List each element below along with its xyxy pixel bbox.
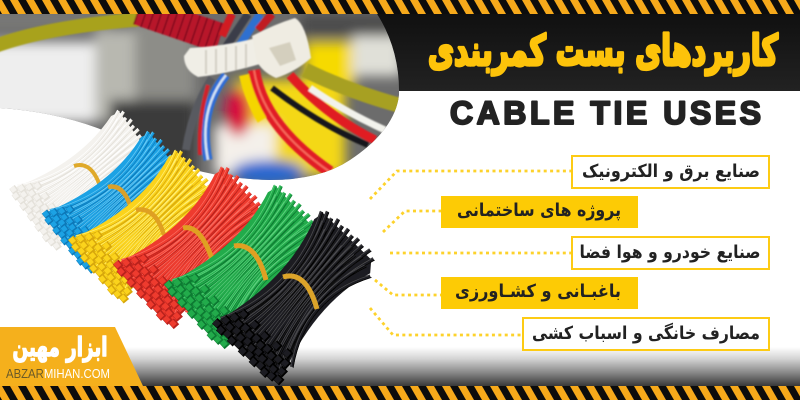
bundle: blue ties xyxy=(43,128,199,273)
photo: cables bound with a cable tie xyxy=(0,14,400,180)
label: household and moving: مصارف خانگی و اسباب کشی xyxy=(532,322,760,344)
label: household and moving xyxy=(523,318,769,350)
label: automotive and aerospace: صنایع خودرو و هوا فضا xyxy=(580,242,760,263)
title black band xyxy=(365,14,800,91)
connector: line 1 xyxy=(370,171,571,199)
logo badge: ABZARMIHAN.COM xyxy=(6,366,110,381)
English heading: CABLE TIE USES xyxy=(450,95,761,131)
bottom hazard stripe xyxy=(0,386,800,400)
top hazard stripe xyxy=(0,0,800,14)
bundle: yellow ties xyxy=(69,146,233,303)
label: construction projects: پروژه های ساختمانی xyxy=(457,200,621,221)
logo badge: ابزار مهین xyxy=(12,333,108,363)
bundle: red ties xyxy=(114,163,284,328)
connector: line 4 xyxy=(375,280,441,295)
product photo: bundles of coloured cable ties xyxy=(10,107,390,385)
label: automotive and aerospace xyxy=(572,237,769,269)
label: gardening and agriculture xyxy=(441,277,638,309)
label: electrical and electronics xyxy=(572,156,769,188)
logo badge xyxy=(0,327,143,386)
bundle: white ties xyxy=(10,107,167,250)
label: electrical and electronics: صنایع برق و الکترونیک xyxy=(582,161,760,182)
bundle: black ties xyxy=(213,206,390,385)
bottom grey gradient floor xyxy=(0,347,800,386)
dotted connector lines xyxy=(370,171,571,335)
connector: line 2 xyxy=(383,211,441,232)
bundle: green ties xyxy=(165,181,337,349)
connector: line 3 xyxy=(390,252,571,254)
label: construction projects xyxy=(441,196,638,228)
connector: line 5 xyxy=(370,308,522,335)
label: gardening and agriculture: باغبـانی و کشـاورزی xyxy=(455,281,621,302)
